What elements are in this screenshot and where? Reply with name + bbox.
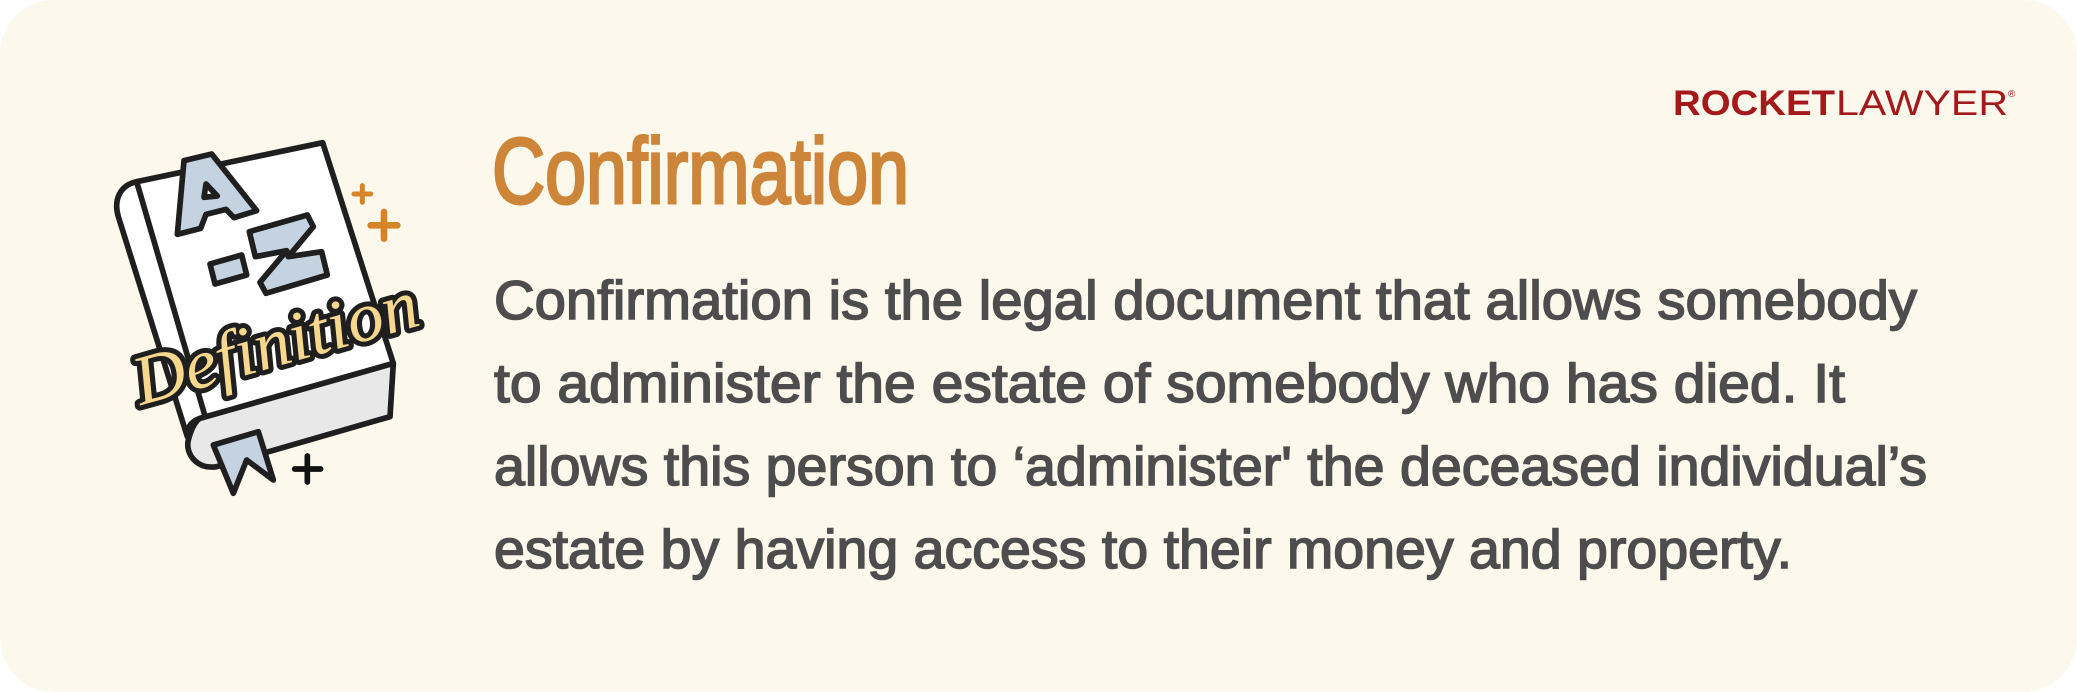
logo: Rocket Lawyer: ROCKET [1673,84,1835,123]
body text: allows this person to ‘administer' the deceased individual’s [494,435,1927,497]
sparkles [354,186,371,202]
logo: Rocket Lawyer: LAWYER [1836,84,2008,123]
dash [210,255,247,284]
body text: to administer the estate of somebody who has died. It [494,352,1845,414]
logo: Rocket Lawyer: ® [2008,89,2016,100]
logo: Rocket Lawyer [1673,84,2016,123]
icon: A-Z definition book [117,143,427,493]
definition script label: Definition [123,266,427,421]
letter Z [249,215,327,293]
body text [494,269,1927,580]
body text: Confirmation is the legal document that allows somebody [494,269,1918,331]
letter A [177,154,257,234]
book pages [188,363,393,467]
bookmark [213,432,273,493]
title: Confirmation [492,119,909,223]
body text: estate by having access to their money and property. [494,518,1792,580]
book cover [117,143,393,437]
